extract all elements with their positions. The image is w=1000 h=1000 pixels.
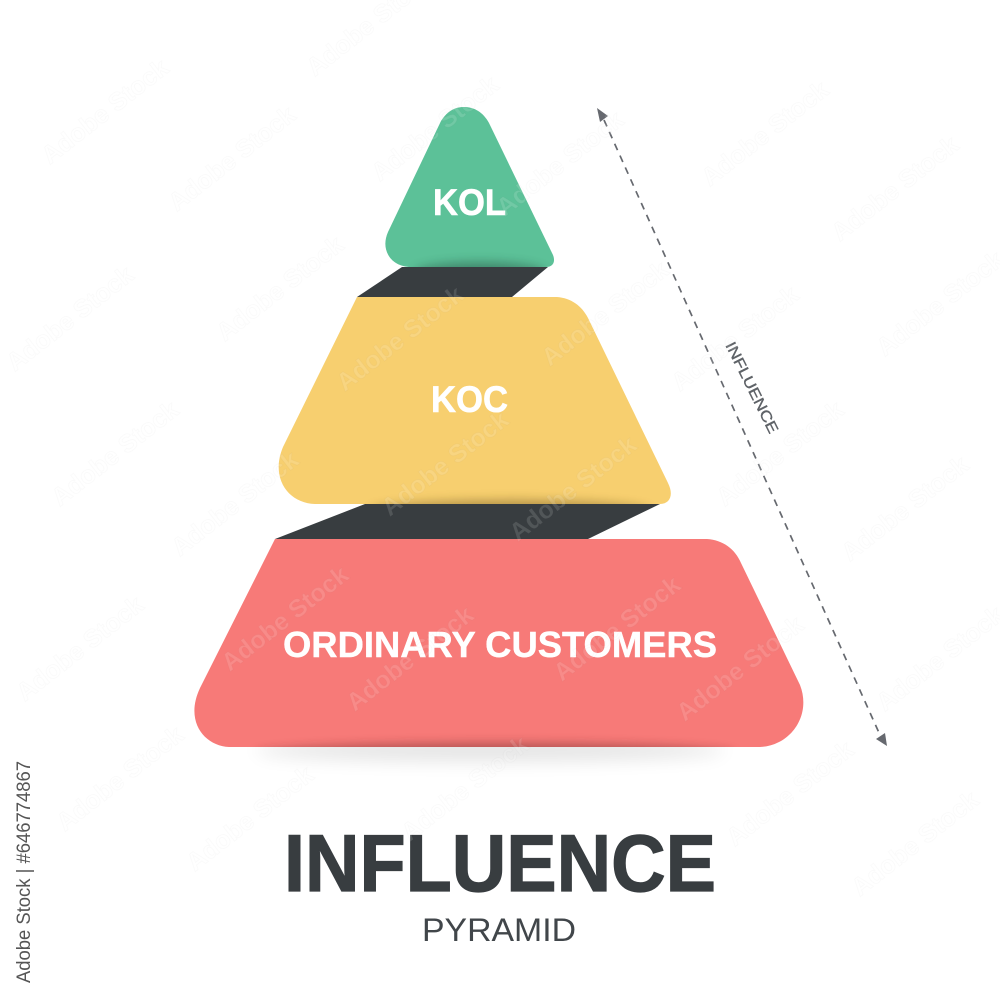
- watermark pattern: Adobe Stock: [504, 431, 642, 547]
- stock credit vertical text: Adobe Stock | #646774867: [14, 761, 35, 983]
- watermark pattern: Adobe Stock: [396, 731, 534, 847]
- watermark pattern: Adobe Stock: [721, 736, 859, 852]
- watermark pattern: Adobe Stock: [366, 71, 504, 187]
- watermark pattern: Adobe Stock: [548, 571, 686, 687]
- watermark pattern: Adobe Stock: [1, 261, 139, 377]
- arrow: influence direction, double headed dashed: [597, 108, 887, 746]
- watermark pattern: Adobe Stock: [211, 231, 349, 347]
- watermark pattern: Adobe Stock: [46, 396, 184, 512]
- panel: ordinary customers tier: [194, 539, 803, 765]
- label: KOL: KOL: [433, 182, 506, 223]
- watermark pattern: Adobe Stock: [536, 256, 674, 372]
- ground shadow under pyramid: [255, 739, 725, 761]
- watermark pattern: Adobe Stock: [11, 591, 149, 707]
- watermark pattern: Adobe Stock: [696, 76, 834, 192]
- label: KOC: KOC: [431, 379, 508, 420]
- watermark pattern: Adobe Stock: [671, 611, 809, 727]
- connector: dark band between KOL and KOC: [357, 267, 548, 297]
- watermark pattern: Adobe Stock: [826, 131, 964, 247]
- watermark pattern: Adobe Stock: [376, 406, 514, 522]
- watermark pattern: Adobe Stock: [846, 786, 984, 902]
- watermark pattern: Adobe Stock: [491, 106, 629, 222]
- connector: dark band between KOC and ordinary customers: [275, 504, 660, 539]
- watermark pattern: Adobe Stock: [51, 721, 189, 837]
- label: ordinary customers: ORDINARY CUSTOMERS: [283, 624, 717, 665]
- arrow label: influence: INFLUENCE: [722, 339, 781, 436]
- watermark pattern: Adobe Stock: [166, 446, 304, 562]
- panel: KOC tier: [279, 297, 671, 522]
- watermark pattern: Adobe Stock: [341, 601, 479, 717]
- watermark pattern: Adobe Stock: [836, 451, 974, 567]
- watermark pattern: Adobe Stock: [666, 281, 804, 397]
- subtitle: pyramid: PYRAMID: [422, 912, 576, 948]
- watermark pattern: Adobe Stock: [163, 101, 301, 217]
- title: influence: INFLUENCE: [284, 819, 716, 909]
- infographic canvas: [16, 107, 887, 983]
- watermark pattern: Adobe Stock: [181, 761, 319, 877]
- watermark pattern: Adobe Stock: [36, 54, 174, 170]
- panel: KOL tier: [385, 107, 554, 284]
- watermark pattern: Adobe Stock: [711, 396, 849, 512]
- watermark pattern: Adobe Stock: [216, 561, 354, 677]
- watermark pattern: Adobe Stock: [331, 281, 469, 397]
